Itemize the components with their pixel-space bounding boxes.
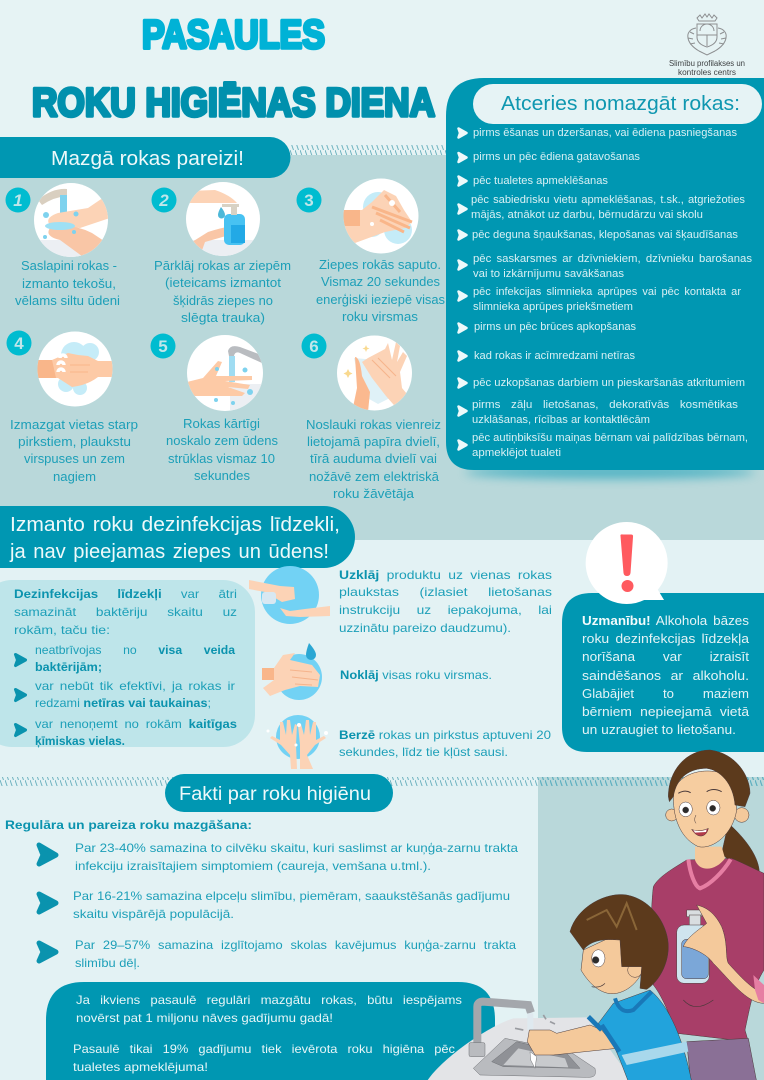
list of moments to wash hands: pirms un pēc ēdiena gatavošanas (473, 151, 641, 163)
icon: rubbing hands (266, 715, 328, 769)
step 3: Vismaz 20 sekundes (321, 275, 440, 289)
panel: sanitizer limitations: rokām, taču tie: (14, 623, 110, 637)
step 6: nožāvē zem elektriskā (309, 470, 439, 484)
list of moments to wash hands: pirms un pēc brūces apkopšanas (474, 321, 636, 333)
logo: Slimību profilakses un kontroles centrs: Slimību profilakses un (669, 59, 745, 68)
step 2 (152, 182, 291, 325)
heading: use hand sanitizer (0, 506, 355, 568)
list of moments to wash hands: pēc infekcijas slimnieka aprūpes vai pēc kontakta ar (473, 286, 741, 298)
callout: global statistics: Ja ikviens pasaulē regulāri mazgātu rokas, būtu iespējams (76, 993, 462, 1007)
list of moments to wash hands: pēc sabiedrisku vietu apmeklēšanas, t.sk., atgriežoties (471, 194, 746, 206)
panel: caution: norīšana var izraisīt (582, 650, 750, 664)
title: ROKU HIGIĒNAS DIENA (32, 81, 435, 125)
step 3: roku virsmas (342, 310, 418, 324)
facts list: Par 29–57% samazina izglītojamo skolas kavējumus kuņģa-zarnu trakta (75, 938, 516, 952)
callout: global statistics: Pasaulē tikai 19% gadījumu tiek ievērota roku higiēna pēc (73, 1042, 455, 1056)
heading: Atceries nomazgāt rokas (473, 84, 762, 124)
facts list (5, 818, 518, 970)
list of moments to wash hands: pēc uzkopšanas darbiem un pieskaršanās atkritumiem (473, 377, 745, 389)
heading: Fakti par roku higiēnu (165, 774, 393, 812)
step 1: 1 (13, 191, 23, 210)
title: PASAULES (142, 13, 325, 57)
panel: caution: Uzmanību! Alkohola bāzes (582, 614, 749, 628)
list of moments to wash hands: kad rokas ir acīmredzami netīras (474, 350, 635, 362)
panel: sanitizer limitations: Dezinfekcijas līdzekļi var ātri (14, 587, 237, 601)
panel: caution: Glabājiet to maziem (582, 687, 749, 701)
step 2: šķidrās ziepes no (173, 294, 273, 308)
text: sanitizer use instructions: Berzē rokas un pirkstus aptuveni 20 (339, 728, 551, 742)
title (32, 13, 435, 125)
facts list: skaitu vispārējā populācijā. (73, 907, 234, 921)
step 4: virspuses un zem (24, 452, 125, 466)
step 6: Noslauki rokas vienreiz (306, 418, 441, 432)
step 2: Pārklāj rokas ar ziepēm (154, 259, 291, 273)
panel: sanitizer limitations: ķīmiskas vielas. (35, 734, 125, 748)
illustration: mother (651, 750, 764, 1080)
icon: exclamation speech bubble (586, 522, 668, 604)
panel: sanitizer limitations: var nenoņemt no rokām kaitīgas (35, 717, 237, 731)
text: sanitizer use instructions: Noklāj visas roku virsmas. (340, 668, 492, 682)
logo: Slimību profilakses un kontroles centrs: kontroles centrs (678, 68, 736, 77)
step 2: 2 (158, 191, 169, 210)
step 2: slēgta trauka) (181, 311, 265, 325)
panel: caution: un uzraugiet to lietošanu. (582, 723, 736, 737)
list of moments to wash hands: pēc deguna šņaukšanas, klepošanas vai šķaudīšanas (472, 229, 738, 241)
step 3: 3 (304, 191, 314, 210)
panel: sanitizer limitations (0, 580, 255, 748)
list of moments to wash hands: pēc saskarsmes ar dzīvniekiem, dzīvnieku barošanas (473, 253, 753, 265)
step 6: 6 (309, 337, 319, 356)
step 3: Ziepes rokās saputo. (319, 258, 441, 272)
list of moments to wash hands: pirms zāļu lietošanas, dekoratīvās kosmētikas (472, 399, 739, 411)
list of moments to wash hands: pirms ēšanas un dzeršanas, vai ēdiena pasniegšanas (473, 127, 738, 139)
callout: global statistics: novērst pat 1 miljonu nāves gadījumu gadā! (76, 1011, 333, 1025)
list of moments to wash hands: mājās, atnākot uz darbu, bērnudārzu vai skolu (471, 209, 703, 221)
step 6: roku žāvētāja (333, 487, 414, 501)
step 5: Rokas kārtīgi (183, 417, 260, 431)
panel: sanitizer limitations: var nebūt tik efektīvi, ja rokas ir (35, 679, 235, 693)
list of moments to wash hands: apmeklējot tualeti (472, 447, 561, 459)
text: sanitizer use instructions: plaukstas (izlasiet lietošanas (339, 585, 552, 599)
text: sanitizer use instructions: Uzklāj produktu uz vienas rokas (339, 568, 552, 582)
step 5: strūklas vismaz 10 (168, 452, 275, 466)
list of moments to wash hands (458, 127, 753, 459)
panel: caution: saindēšanos ar alkoholu. (582, 669, 749, 683)
illustration: boy (527, 895, 692, 1080)
step 5: sekundes (194, 469, 250, 483)
step 1 (6, 183, 120, 308)
list of moments to wash hands: vai to izkārnījumu savākšanas (473, 268, 625, 280)
step 6 (302, 334, 441, 501)
facts list: slimību dēļ. (75, 956, 140, 970)
panel: sanitizer limitations: samazināt baktēriju skaitu uz (14, 605, 237, 619)
text: sanitizer use instructions (339, 568, 552, 759)
illustration: sink and faucet (427, 1002, 633, 1080)
list of moments to wash hands: pēc tualetes apmeklēšanas (473, 175, 608, 187)
panel: wash steps background (0, 155, 764, 540)
step 5: 5 (158, 337, 168, 356)
callout: global statistics: tualetes apmeklējuma! (73, 1060, 208, 1074)
facts list: Par 16-21% samazina elpceļu slimību, piemēram, saaukstēšanās gadījumu (73, 889, 510, 903)
illustration: mother and boy washing hands (427, 750, 764, 1080)
heading: Mazgā rokas pareizi (0, 137, 290, 178)
panel: remember to wash hands (446, 78, 764, 479)
text: sanitizer use instructions: uzzinātu pareizo daudzumu). (339, 621, 511, 635)
icon: bullet arrows (16, 654, 26, 736)
step 4: nagiem (53, 470, 96, 484)
step 1: vēlams siltu ūdeni (15, 294, 120, 308)
step 4 (6, 330, 138, 484)
text: sanitizer use instructions: instrukciju uz iepakojuma, lai (339, 603, 552, 617)
step 2: (ieteicams izmantot (165, 276, 282, 290)
heading: Fakti par roku higiēnu: Fakti par roku higiēnu (179, 784, 371, 805)
panel: sanitizer limitations: neatbrīvojas no visa veida (35, 643, 235, 657)
step 1: Saslapini rokas - (21, 259, 117, 273)
panel: caution: bērniem nepieejamā vietā (582, 705, 749, 719)
icon: fact arrows (39, 845, 56, 961)
heading: use hand sanitizer: Izmanto roku dezinfekcijas līdzekli, (10, 513, 340, 536)
list of moments to wash hands: uzklāšanas, rīcības ar kontaktlēcām (472, 414, 650, 426)
heading: Atceries nomazgāt rokas: Atceries nomazgāt rokas: (501, 93, 740, 115)
list of moments to wash hands: pēc autiņbiksīšu maiņas bērnam vai palīdzības bērnam, (472, 432, 748, 444)
facts list: infekciju izraisītajiem simptomiem (caureja, vemšana u.tml.). (75, 859, 431, 873)
step 4: pirkstiem, plaukstu (18, 435, 131, 449)
step 6: tīrā auduma dvielī vai (310, 452, 437, 466)
panel: illustration background (538, 786, 764, 1080)
panel: caution: roku dezinfekcijas līdzekļa (582, 632, 749, 646)
callout: global statistics (46, 982, 495, 1080)
icon: covering hand surfaces (262, 643, 322, 700)
panel: caution (562, 522, 764, 752)
step 4: 4 (14, 334, 24, 353)
step 6: lietojamā papīra dvielī, (307, 435, 440, 449)
text: sanitizer use instructions: sekundes, līdz tie kļūst sausi. (339, 745, 508, 759)
logo: Slimību profilakses un kontroles centrs (669, 14, 745, 77)
facts list: Regulāra un pareiza roku mazgāšana: (5, 818, 252, 832)
heading: use hand sanitizer: ja nav pieejamas ziepes un ūdens! (9, 540, 329, 563)
step 1: izmanto tekošu, (22, 277, 116, 291)
step 3: enerģiski ieziepē visas (316, 293, 445, 307)
facts list: Par 23-40% samazina to cilvēku skaitu, kuri saslimst ar kuņģa-zarnu trakta (75, 841, 518, 855)
panel: sanitizer limitations: redzami netīras vai taukainas ; (35, 696, 211, 710)
list of moments to wash hands: slimnieka aprūpes priekšmetiem (473, 301, 633, 313)
step 5 (150, 334, 278, 483)
step 4: Izmazgat vietas starp (10, 418, 138, 432)
step 5: noskalo zem ūdens (166, 434, 278, 448)
panel: sanitizer limitations: baktērijām; (35, 660, 102, 674)
icon: applying sanitizer (249, 566, 330, 624)
heading: Mazgā rokas pareizi: Mazgā rokas pareizi! (51, 148, 244, 170)
step 3 (296, 178, 445, 324)
